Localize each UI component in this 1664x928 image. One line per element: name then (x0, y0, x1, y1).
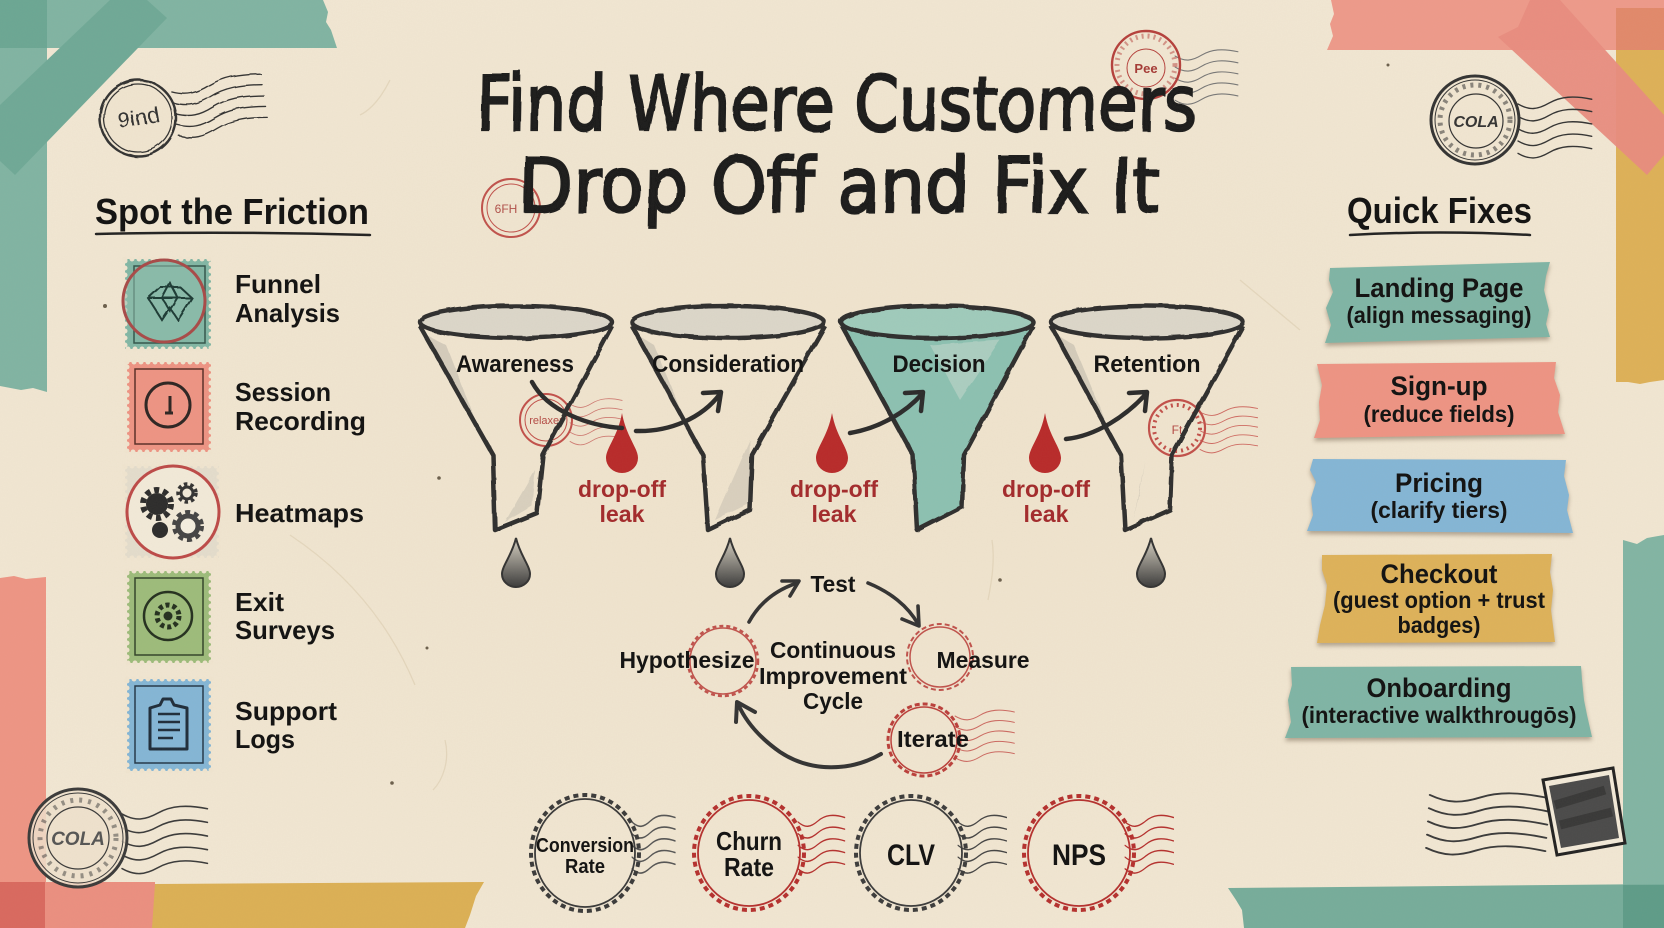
postmark: bottom-right square stamp (1426, 768, 1625, 861)
postmark: bottom-left cola (29, 789, 208, 887)
drop-off leak 2: drop-off (790, 476, 878, 502)
stamp: iterate (888, 704, 1014, 776)
tape: sign-up: (reduce fields) (1364, 401, 1514, 427)
tape: onboarding: (interactive walkthrougōs) (1302, 702, 1576, 728)
metric stamp: churn rate (694, 796, 845, 910)
item: session recording: Session (235, 377, 331, 407)
postmark: red stamp above title: Pee (1134, 61, 1158, 76)
washi tape: bottom-right teal corner (1228, 535, 1664, 928)
funnel stage: consideration (632, 306, 825, 587)
red postmark behind funnel (1149, 400, 1258, 456)
tape: checkout: (guest option + trust (1333, 587, 1545, 613)
item: exit surveys (127, 571, 335, 663)
red postmark behind funnel (520, 394, 622, 446)
arrow: consideration to decision (850, 392, 923, 433)
panel: quick fixes (1285, 190, 1592, 738)
panel: spot the friction (95, 191, 370, 771)
panel: continuous improvement cycle: Hypothesize (620, 647, 754, 673)
postmark: red stamp beside title: 6FH (495, 202, 517, 216)
postmark: red stamp above title (1112, 31, 1238, 104)
item: support logs (127, 679, 337, 771)
title: Find Where Customers (475, 59, 1198, 148)
heading: quick fixes: Quick Fixes (1347, 190, 1532, 231)
item: funnel analysis: Analysis (235, 298, 340, 328)
heading: spot the friction: Spot the Friction (95, 191, 369, 232)
stamp: hypothesize (688, 626, 758, 696)
cycle centre label: Continuous (770, 637, 896, 663)
postmark: top-left find (100, 72, 268, 156)
metric stamp: clv (856, 796, 1007, 910)
tape: onboarding (1285, 666, 1592, 738)
cycle arrow: test to measure (868, 583, 919, 626)
arrow: decision to retention (1066, 392, 1147, 439)
cycle arrow: iterate to hypothesize (736, 702, 881, 767)
item: session recording (127, 362, 366, 452)
cycle centre label (759, 637, 907, 714)
drop-off leak 3 (1002, 413, 1090, 527)
item: heatmaps (125, 466, 364, 558)
icon: grey drip (1137, 538, 1165, 587)
icon: grey drip (716, 538, 744, 587)
red postmark behind funnel: relaxer (529, 415, 563, 427)
washi tape: top-left teal corner (0, 0, 337, 392)
tape: landing page: Landing Page (1354, 273, 1524, 303)
title (475, 59, 1198, 230)
icon: grey drip (502, 538, 530, 587)
tape: landing page (1325, 262, 1550, 343)
panel: continuous improvement cycle: Iterate (897, 726, 969, 752)
funnel stage: awareness: Awareness (456, 351, 574, 378)
item: session recording: Recording (235, 406, 366, 436)
item: support logs: Support (235, 696, 337, 726)
item: heatmaps: Heatmaps (235, 498, 364, 528)
postmark: bottom-left cola: COLA (51, 829, 105, 850)
tape: checkout: badges) (1398, 612, 1480, 638)
item: exit surveys: Exit (235, 587, 284, 617)
drop-off leak 1 (578, 413, 666, 527)
item: support logs: Logs (235, 724, 295, 754)
tape: pricing: (clarify tiers) (1370, 497, 1508, 523)
item: exit surveys: Surveys (235, 615, 335, 645)
washi tape: bottom-left coral and yellow corner (0, 576, 484, 928)
funnel stage: decision: Decision (892, 351, 986, 378)
item: funnel analysis: Funnel (235, 269, 321, 299)
drop-off leak 3: drop-off (1002, 476, 1090, 502)
panel: continuous improvement cycle (620, 571, 1030, 776)
tape: checkout: Checkout (1380, 559, 1498, 589)
red postmark behind funnel: Ft (1172, 423, 1183, 437)
funnel stage: consideration: Consideration (652, 351, 804, 378)
funnel stage: retention (1051, 306, 1258, 587)
tape: sign-up (1314, 362, 1565, 438)
drop-off leak 2: leak (812, 501, 857, 527)
metric stamp: conversion rate: Conversion (536, 835, 634, 857)
tape: pricing: Pricing (1395, 468, 1483, 498)
cycle centre label: Improvement (759, 663, 907, 689)
metric stamp: clv: CLV (887, 839, 935, 872)
postmark: top-right cola (1431, 76, 1592, 164)
metric stamp: conversion rate: Rate (565, 856, 605, 878)
funnel stage: retention: Retention (1094, 351, 1200, 378)
tape: sign-up: Sign-up (1390, 371, 1488, 401)
postmark: red stamp beside title (482, 179, 540, 237)
metric stamp: nps (1024, 796, 1174, 910)
postmark: top-left find: 9ind (116, 102, 161, 133)
tape: pricing (1307, 459, 1573, 533)
item: funnel analysis (123, 259, 340, 349)
drop-off leak 2 (790, 413, 878, 527)
tape: checkout (1317, 554, 1555, 643)
metric stamp: conversion rate (531, 795, 675, 911)
drop-off leak 1: drop-off (578, 476, 666, 502)
cycle arrow: hypothesize to test (749, 581, 799, 622)
arrow: awareness to consideration (532, 382, 721, 431)
metric stamp: nps: NPS (1052, 839, 1106, 872)
metric stamp: churn rate: Churn (716, 826, 782, 856)
stamp: measure (907, 624, 973, 690)
funnel stage: awareness (420, 306, 622, 587)
metric stamp: churn rate: Rate (724, 852, 774, 882)
drop-off leak 1: leak (600, 501, 645, 527)
title: Drop Off and Fix It (518, 141, 1161, 230)
panel: continuous improvement cycle: Test (810, 571, 856, 597)
panel: continuous improvement cycle: Measure (936, 647, 1030, 673)
cycle centre label: Cycle (803, 688, 863, 714)
postmark: top-right cola: COLA (1453, 114, 1499, 131)
washi tape: top-right coral and yellow corner (1327, 0, 1664, 384)
tape: onboarding: Onboarding (1366, 673, 1512, 703)
drop-off leak 3: leak (1024, 501, 1069, 527)
funnel stage: decision (841, 306, 1033, 530)
tape: landing page: (align messaging) (1346, 302, 1532, 328)
